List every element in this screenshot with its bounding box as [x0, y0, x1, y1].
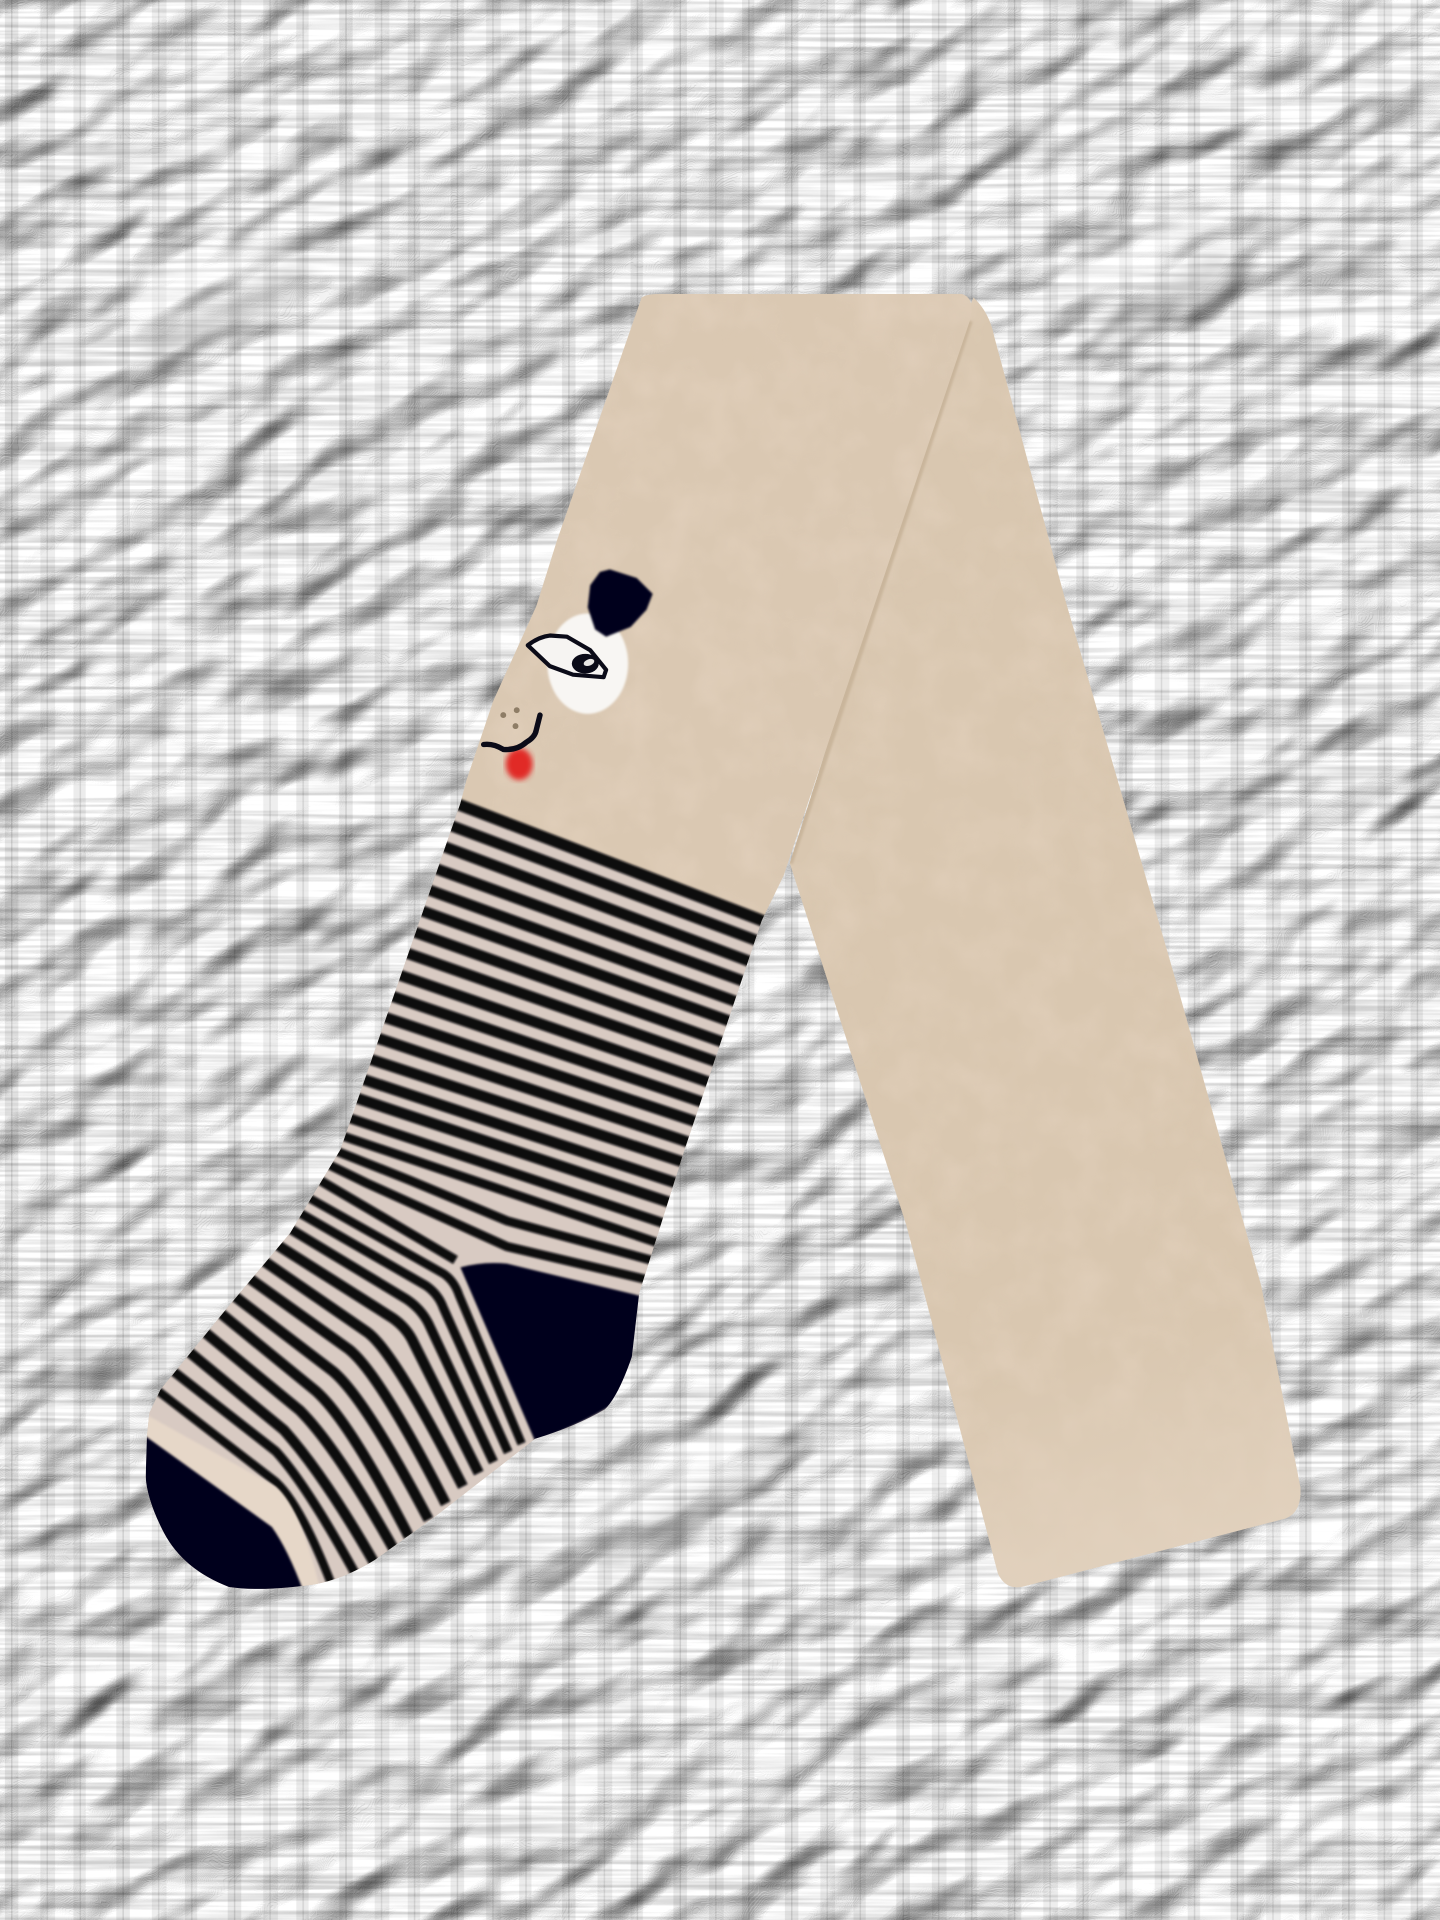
heel [460, 1263, 649, 1441]
ear [588, 569, 653, 637]
face patch [547, 613, 628, 714]
toe [135, 1430, 304, 1598]
mouth [484, 715, 540, 750]
leg stripes [315, 800, 779, 1284]
tongue [506, 748, 533, 780]
eye [528, 636, 606, 677]
dog face [484, 569, 653, 780]
foot stripes [152, 1178, 522, 1582]
ribbed cuff [988, 1444, 1300, 1587]
back leg [784, 294, 1310, 1592]
tights [122, 282, 1310, 1604]
pupil [572, 654, 599, 673]
striped section base [122, 800, 779, 1592]
front leg [122, 282, 1004, 1604]
nose dots [500, 707, 520, 729]
toe band [135, 1408, 321, 1592]
fold shadow [790, 321, 970, 863]
